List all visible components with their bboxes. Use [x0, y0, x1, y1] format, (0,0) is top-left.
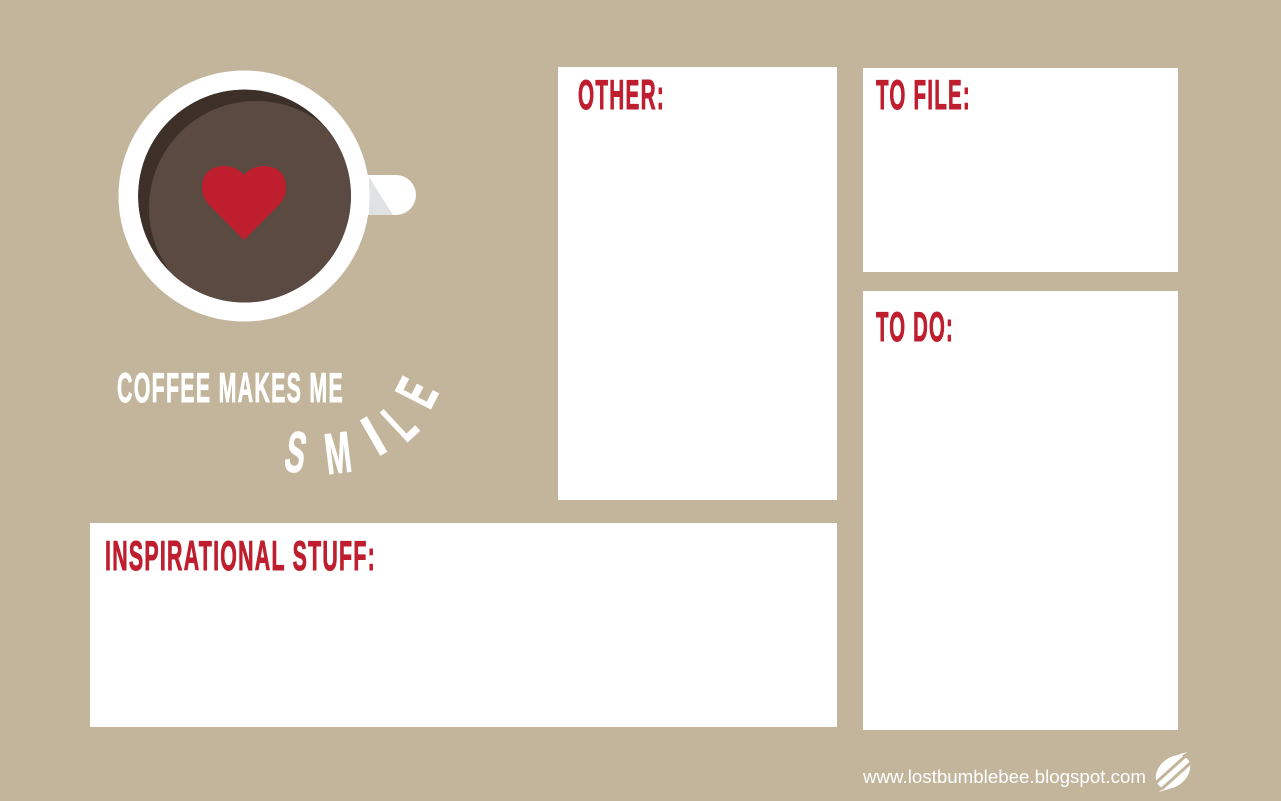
panel: other: OTHER: [578, 71, 665, 118]
curved word: smile: E [383, 369, 451, 417]
panel: to do: TO DO: [876, 303, 954, 350]
curved word: smile: S [280, 419, 311, 486]
cup handle [365, 175, 416, 215]
curved word: smile: M [321, 420, 355, 487]
icon: striped coffee bean logo [1146, 746, 1200, 798]
panel: to do [863, 291, 1178, 730]
panel: inspirational stuff [90, 523, 837, 727]
cup rim [118, 70, 370, 322]
panel: to file: TO FILE: [876, 71, 971, 118]
panel: other [558, 67, 837, 500]
footer url: www.lostbumblebee.blogspot.com [862, 767, 1146, 787]
icon: heart [202, 166, 286, 240]
icon: coffee cup with heart [118, 70, 416, 322]
curved word: smile: I [351, 405, 396, 468]
curved word: smile: L [370, 392, 429, 453]
tagline: coffee makes me: COFFEE MAKES ME [117, 364, 344, 411]
panel: to file [863, 68, 1178, 272]
heading: inspirational stuff: INSPIRATIONAL STUFF: [105, 532, 376, 579]
coffee surface [138, 90, 351, 302]
curved word: smile [280, 369, 451, 487]
